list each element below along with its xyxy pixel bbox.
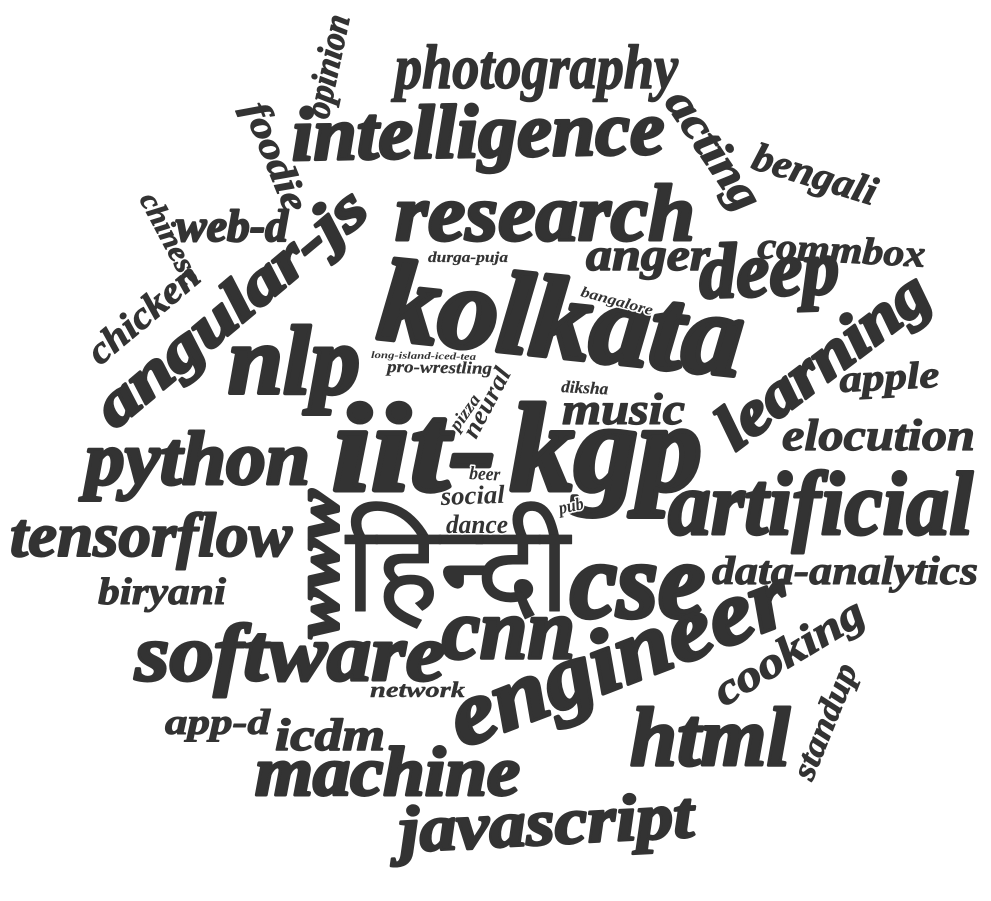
- word: data-analytics: data-analytics: [712, 548, 978, 593]
- word: chinese: chinese: [133, 187, 209, 291]
- word: apple: apple: [838, 354, 940, 401]
- word: durga-puja: durga-puja: [428, 250, 509, 266]
- word: beer: beer: [469, 463, 501, 486]
- word: iit-kgp: kgp: [510, 380, 702, 518]
- word: chicken: chicken: [79, 255, 208, 373]
- word: elocution: elocution: [782, 411, 975, 460]
- word: neural: neural: [456, 361, 517, 443]
- word: long-island-iced-tea: long-island-iced-tea: [371, 350, 476, 363]
- word: www: www: [284, 489, 352, 638]
- word: web-d: web-d: [176, 200, 289, 251]
- word: social: social: [439, 480, 506, 511]
- word: anger: anger: [586, 229, 711, 280]
- word: html: html: [630, 691, 791, 784]
- word: standup: standup: [785, 658, 865, 786]
- word: research: research: [395, 170, 695, 258]
- word: learning: learning: [701, 256, 943, 463]
- word: app-d: app-d: [165, 702, 271, 742]
- word: opinion: opinion: [297, 11, 358, 122]
- word: music: music: [562, 385, 685, 434]
- word: python: python: [79, 417, 310, 501]
- word: cse: cse: [570, 522, 705, 641]
- word: bangalore: bangalore: [579, 284, 655, 319]
- word: cooking: cooking: [704, 587, 873, 716]
- word: bengali: bengali: [747, 134, 883, 214]
- word: software: software: [134, 610, 445, 698]
- word: iit-kgp: iit-: [332, 380, 496, 518]
- word: tensorflow: tensorflow: [10, 502, 293, 570]
- word: iit-kgp: [332, 380, 702, 518]
- word: hindi: हिन्दी: [345, 501, 572, 638]
- word: photography: photography: [391, 34, 678, 102]
- word: foodie: foodie: [235, 96, 317, 218]
- word: cnn: cnn: [442, 581, 575, 677]
- word: artificial: artificial: [668, 455, 973, 554]
- word: intelligence: intelligence: [291, 87, 665, 177]
- word: pub: pub: [555, 493, 585, 518]
- word: kolkata: kolkata: [373, 237, 750, 402]
- word: dance: dance: [446, 510, 508, 539]
- word: pizza: pizza: [444, 390, 484, 436]
- word: network: network: [370, 677, 465, 702]
- word: engineer: engineer: [434, 546, 804, 767]
- word: diksha: diksha: [561, 377, 609, 398]
- word: biryani: biryani: [98, 571, 227, 613]
- word: commbox: commbox: [757, 225, 926, 276]
- word: acting: acting: [656, 79, 773, 220]
- word: javascript: javascript: [387, 779, 697, 868]
- word: icdm: icdm: [275, 709, 385, 760]
- word: machine: machine: [255, 734, 520, 811]
- word: nlp: nlp: [228, 307, 360, 415]
- word: angular-js: angular-js: [80, 173, 381, 441]
- word: deep: deep: [698, 223, 841, 315]
- word: pro-wrestling: pro-wrestling: [385, 357, 493, 378]
